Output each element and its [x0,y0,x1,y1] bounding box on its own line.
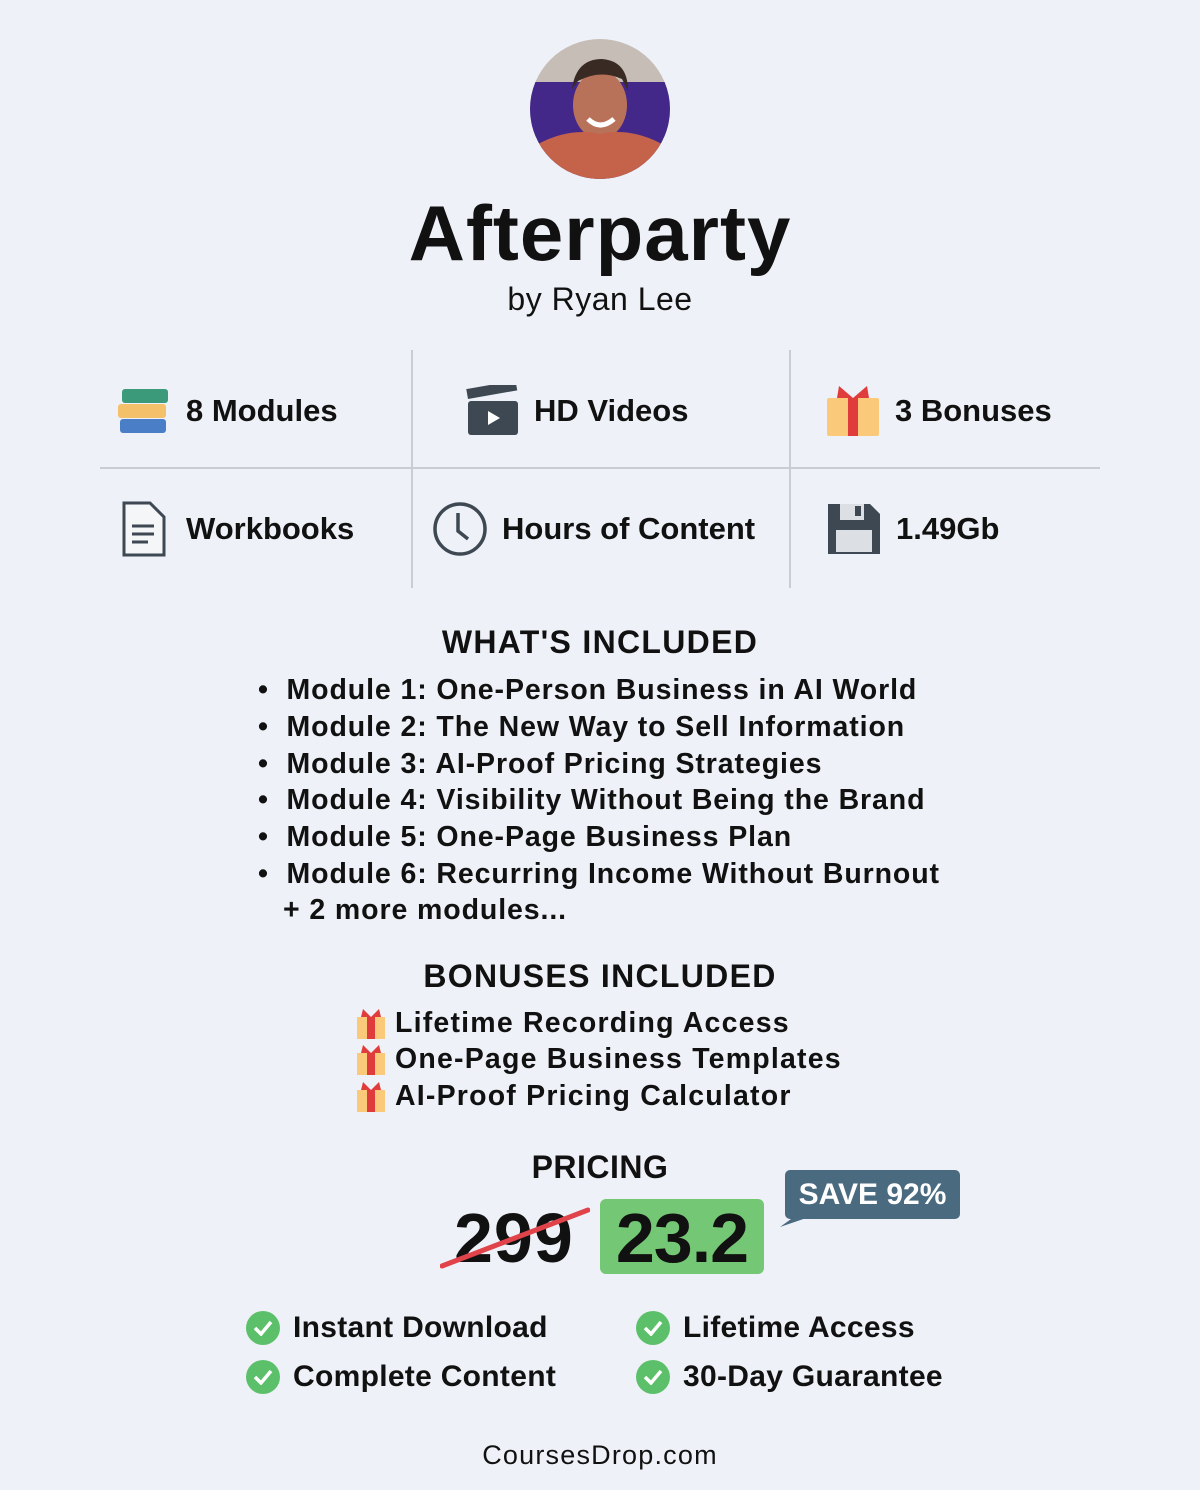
stat: workbooks: Workbooks [186,511,354,546]
module list: • Module 4: Visibility Without Being the Brand [258,784,925,816]
module list: • Module 5: One-Page Business Plan [258,821,792,853]
module list: • Module 1: One-Person Business in AI World [258,674,917,706]
bonus list: One-Page Business Templates [395,1043,842,1075]
stat: hours [433,502,755,556]
old price: 299 [454,1199,574,1277]
heading: pricing: PRICING [532,1149,668,1185]
stat: modules [118,389,338,433]
heading: bonuses: BONUSES INCLUDED [423,958,777,994]
stat: bonuses: 3 Bonuses [895,393,1052,428]
stats grid [100,350,1100,588]
module list: • Module 2: The New Way to Sell Information [258,711,905,743]
heading: what's included: WHAT'S INCLUDED [442,624,758,660]
stat: size: 1.49Gb [896,511,999,546]
features: 30-Day Guarantee [683,1360,943,1393]
stat: size [828,504,999,554]
module list [258,674,940,926]
features: Instant Download [293,1311,548,1344]
subtitle: by Ryan Lee [507,281,693,317]
save badge: SAVE 92% [799,1178,946,1211]
stat: bonuses [827,386,1052,436]
features: Complete Content [293,1360,556,1393]
bonus list: AI-Proof Pricing Calculator [395,1080,792,1112]
module list: + 2 more modules... [283,894,567,926]
bonus list: Lifetime Recording Access [395,1007,790,1039]
stat: workbooks [122,502,354,556]
avatar [530,39,670,179]
stat: videos [466,385,688,435]
module list: • Module 3: AI-Proof Pricing Strategies [258,748,822,780]
stat: hours: Hours of Content [502,511,755,546]
new price: 23.2 [616,1199,748,1277]
bonus list [357,1007,842,1112]
footer: CoursesDrop.com [482,1440,718,1470]
save badge [780,1170,960,1227]
features: Lifetime Access [683,1311,915,1344]
stat: modules: 8 Modules [186,393,338,428]
module list: • Module 6: Recurring Income Without Burnout [258,858,940,890]
features [246,1311,943,1394]
title: Afterparty [409,189,791,277]
stat: videos: HD Videos [534,393,688,428]
